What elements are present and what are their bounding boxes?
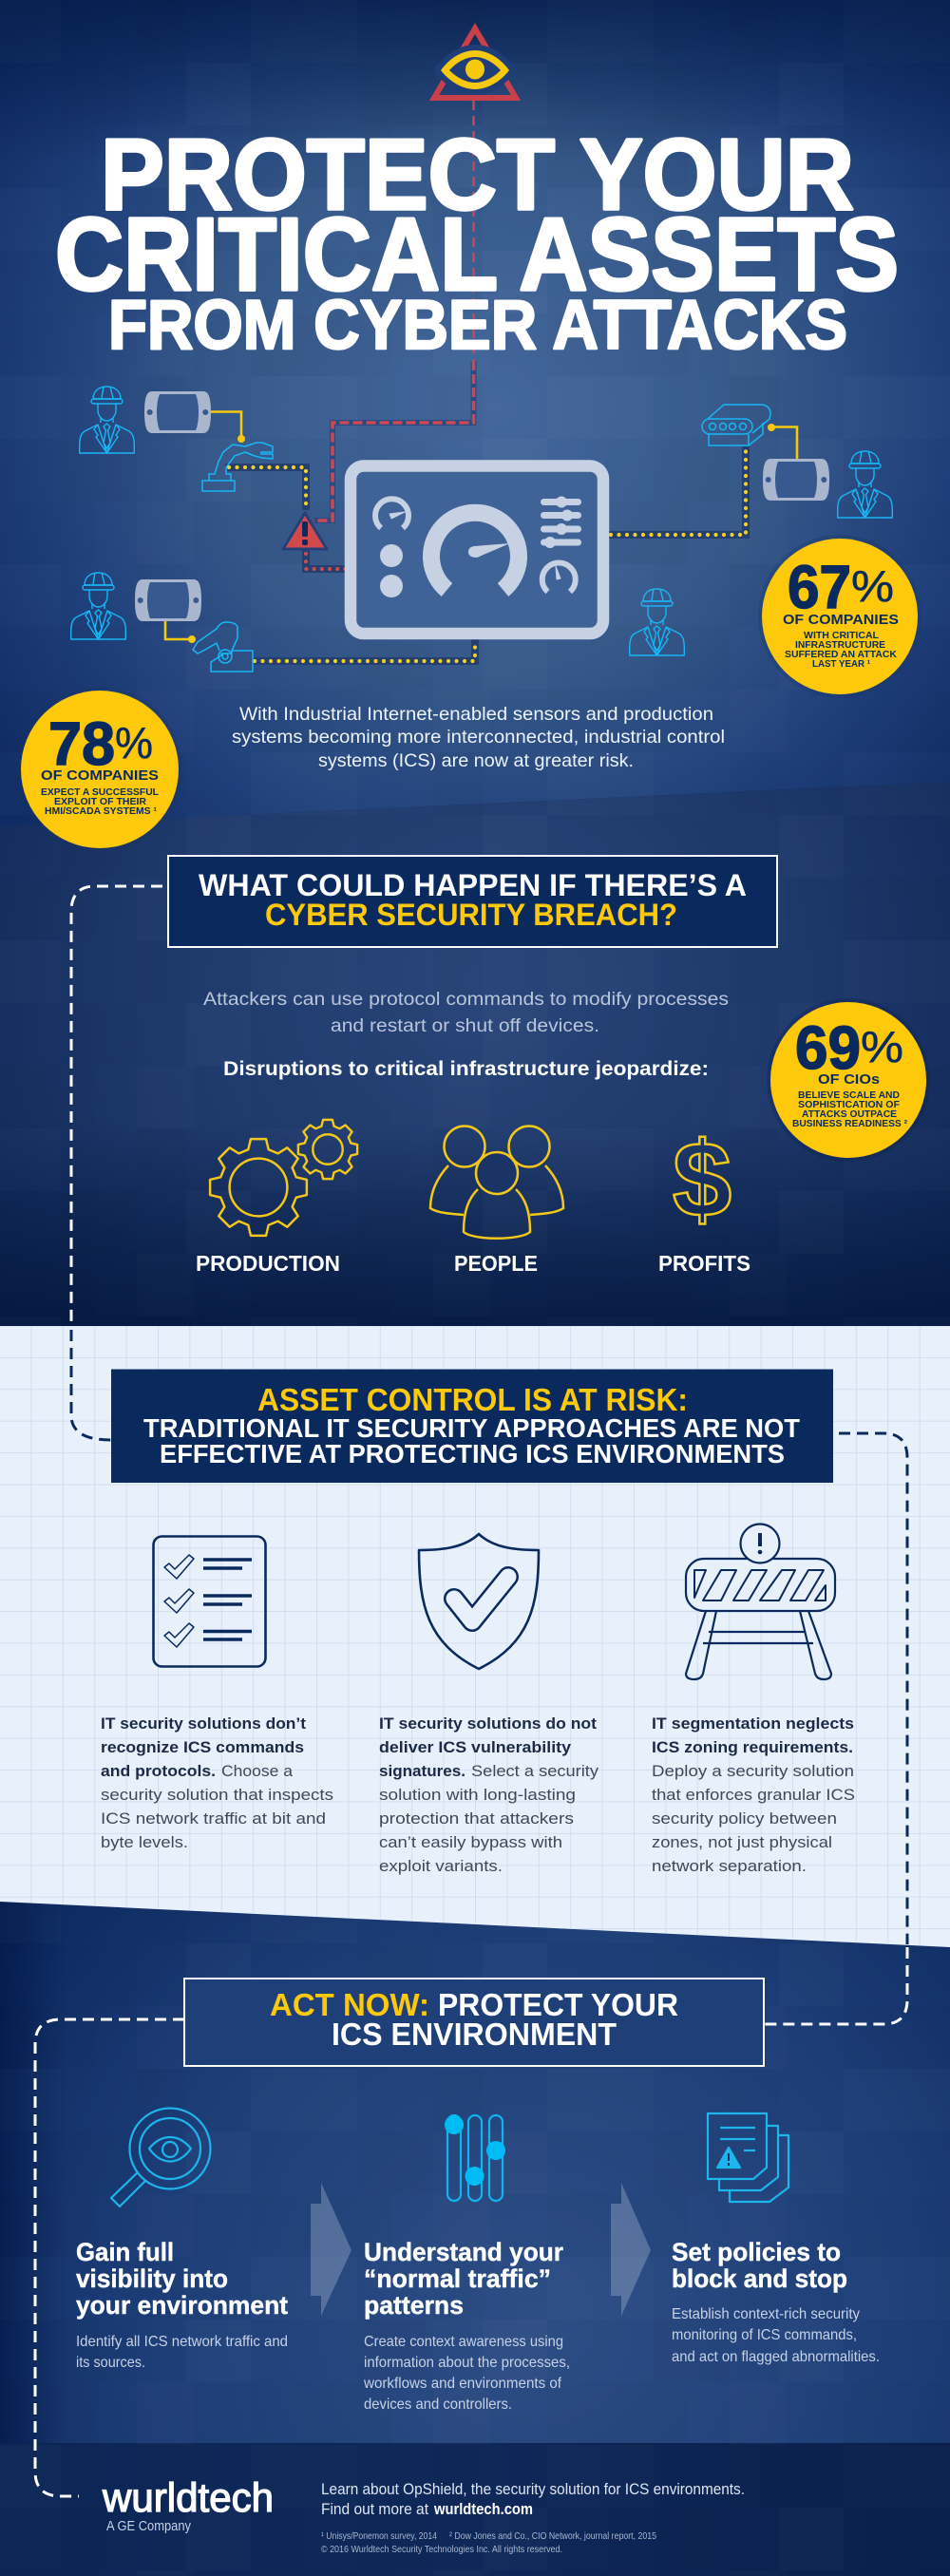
red dashed connector: [314, 101, 473, 521]
heading box: act now: ICS ENVIRONMENT: [332, 2017, 617, 2052]
footnotes: ² Dow Jones and Co., CIO Network, journal report, 2015: [449, 2530, 656, 2542]
step: understand normal traffic: Understand your: [364, 2238, 563, 2266]
text column: IT segmentation neglects: ICS zoning requirements.: [652, 1738, 853, 1756]
stat: 69 percent: 69: [795, 1013, 861, 1082]
label: profits: PROFITS: [658, 1251, 750, 1276]
step: understand normal traffic: Create context awareness using: [364, 2334, 563, 2350]
stat: 67 percent: OF COMPANIES: [783, 613, 899, 628]
icon: screen top left: [144, 391, 211, 433]
title: PROTECT YOUR: [101, 119, 854, 231]
icon: eye in triangle: [434, 28, 516, 98]
step: understand normal traffic: information about the processes,: [364, 2355, 570, 2371]
stat: 67 percent: SUFFERED AN ATTACK: [785, 649, 897, 660]
text column: IT segmentation neglects: IT segmentation neglects: [652, 1714, 854, 1733]
icon: robot arm top: [202, 443, 273, 491]
stat: 78 percent: HMI/SCADA SYSTEMS ¹: [45, 805, 157, 817]
footer call to action: [321, 2480, 745, 2518]
stat: 67 percent: [758, 535, 922, 698]
icon: worker top left: [80, 387, 134, 453]
dotted connector: alert to panel: [306, 550, 346, 569]
step: set policies: Establish context-rich security: [672, 2306, 860, 2322]
yellow link lower left: [165, 621, 196, 643]
step: set policies: monitoring of ICS commands,: [672, 2327, 857, 2343]
stat: 78 percent: EXPLOIT OF THEIR: [54, 796, 146, 807]
footer call to action: Learn about OpShield, the security solution for ICS environments.: [321, 2480, 745, 2498]
footnotes: [321, 2530, 656, 2555]
text column: IT segmentation neglects: Deploy a security solution: [652, 1762, 854, 1780]
text column: IT security solutions don't recognize: ICS network traffic at bit and: [101, 1809, 326, 1828]
step: set policies: block and stop: [672, 2264, 847, 2293]
heading box: act now: [184, 1979, 764, 2066]
background: act now section: [0, 1900, 950, 2446]
stat: 69 percent: OF CIOs: [818, 1072, 880, 1088]
icon: robot arm lower: [193, 622, 253, 672]
yellow link top left: [211, 412, 245, 443]
footer call to action: wurldtech.com: [433, 2500, 533, 2518]
icon: alert triangle: [283, 513, 327, 549]
text column: IT security solutions don't recognize: byte levels.: [101, 1833, 188, 1851]
dotted connector: panel to lower robot arm: [253, 638, 475, 661]
stat: 69 percent: BUSINESS READINESS ²: [792, 1118, 907, 1129]
text column: IT security solutions do not deliver: deliver ICS vulnerability: [379, 1738, 572, 1756]
step: gain full visibility: Gain full: [76, 2238, 174, 2266]
stat: 67 percent: %: [851, 561, 894, 611]
stat: 69 percent: SOPHISTICATION OF: [798, 1099, 901, 1110]
step: set policies: Set policies to: [672, 2238, 841, 2266]
connector: dashed path left, breach box to asset box: [71, 886, 162, 1440]
heading box: asset control: EFFECTIVE AT PROTECTING ICS ENVIRONMENTS: [160, 1439, 785, 1468]
stat: 67 percent: LAST YEAR ¹: [812, 658, 870, 670]
stat: 78 percent: [17, 687, 182, 852]
heading box: breach: [168, 856, 777, 947]
text column: IT security solutions do not deliver: [379, 1714, 599, 1875]
step: understand normal traffic: workflows and environments of: [363, 2376, 562, 2392]
icon: gears: [210, 1120, 357, 1236]
text column: IT security solutions do not deliver: protection that attackers: [379, 1809, 574, 1828]
icon: people: [430, 1127, 563, 1239]
text column: IT security solutions don't recognize: IT security solutions don’t: [101, 1714, 306, 1733]
icon: dollar sign: $: [673, 1120, 732, 1239]
icon: conveyor machine: [702, 405, 770, 445]
background: footer band: [0, 2443, 950, 2576]
text: attackers: and restart or shut off devices.: [331, 1016, 599, 1036]
step: understand normal traffic: [363, 2238, 570, 2413]
text column: IT segmentation neglects: [652, 1714, 855, 1875]
step: understand normal traffic: patterns: [364, 2291, 464, 2320]
title: [55, 119, 899, 364]
heading box: breach: CYBER SECURITY BREACH?: [265, 898, 677, 932]
logo: wurldtech: wurldtech: [102, 2475, 274, 2521]
text column: IT segmentation neglects: security policy between: [652, 1809, 837, 1828]
intro paragraph: [232, 704, 725, 771]
heading box: act now: ACT NOW:: [270, 1987, 429, 2022]
stat: 78 percent: EXPECT A SUCCESSFUL: [41, 786, 160, 798]
background: light grid section: [0, 1326, 950, 1947]
arrow: step two to three: [611, 2183, 651, 2316]
step: gain full visibility: Identify all ICS network traffic and: [76, 2334, 288, 2350]
connector: dashed path left, act now box to logo: [35, 2019, 184, 2496]
icon: worker lower left: [71, 573, 125, 639]
icon: worker right: [838, 451, 892, 518]
stat: 67 percent: 67: [788, 553, 851, 621]
background: breach section: [0, 782, 950, 1326]
heading box: asset control: TRADITIONAL IT SECURITY APPROACHES ARE NOT: [143, 1413, 800, 1443]
icon: control panel: [351, 465, 603, 634]
step: gain full visibility: visibility into: [76, 2264, 228, 2293]
logo: wurldtech: A GE Company: [106, 2518, 191, 2534]
icon: screen lower left: [135, 579, 201, 621]
label: production: PRODUCTION: [196, 1251, 340, 1276]
step: gain full visibility: [76, 2238, 288, 2371]
footer call to action: Find out more at: [321, 2500, 428, 2518]
icon: screen right: [763, 459, 829, 501]
text: attackers: [203, 990, 729, 1036]
icon: magnifier with eye: [111, 2109, 211, 2207]
connector: dashed path right, asset box to act now box: [765, 1433, 907, 2024]
text column: IT security solutions don't recognize: recognize ICS commands: [101, 1738, 304, 1756]
text column: IT security solutions do not deliver: exploit variants.: [379, 1857, 503, 1875]
stat: 69 percent: BELIEVE SCALE AND: [798, 1089, 900, 1101]
intro paragraph: With Industrial Internet-enabled sensors and production: [239, 704, 713, 725]
stat: 78 percent: 78: [48, 710, 115, 778]
text column: IT security solutions don't recognize: [101, 1714, 333, 1851]
step: gain full visibility: your environment: [76, 2291, 288, 2320]
arrow: step one to two: [311, 2183, 352, 2316]
intro paragraph: systems (ICS) are now at greater risk.: [318, 750, 634, 771]
intro paragraph: systems becoming more interconnected, industrial control: [232, 727, 725, 748]
step: gain full visibility: its sources.: [76, 2355, 145, 2371]
title: CRITICAL ASSETS: [55, 197, 899, 313]
text column: IT security solutions don't recognize: and protocols.: [101, 1762, 216, 1780]
step: understand normal traffic: devices and controllers.: [364, 2396, 512, 2413]
diagram: connected ICS devices: [71, 387, 892, 672]
step: understand normal traffic: “normal traffic”: [364, 2264, 551, 2293]
stat: 67 percent: WITH CRITICAL: [804, 630, 880, 641]
stat: 67 percent: INFRASTRUCTURE: [795, 639, 885, 651]
text column: IT security solutions do not deliver: IT security solutions do not: [379, 1714, 597, 1733]
text column: IT security solutions do not deliver: signatures.: [379, 1762, 466, 1780]
dotted connector: robot arm to alert: [225, 467, 306, 510]
text column: IT segmentation neglects: zones, not just physical: [652, 1833, 832, 1851]
stat: 69 percent: ATTACKS OUTPACE: [802, 1108, 897, 1120]
text column: IT segmentation neglects: that enforces granular ICS: [652, 1786, 855, 1804]
stat: 78 percent: %: [115, 718, 153, 767]
footnotes: © 2016 Wurldtech Security Technologies Inc. All rights reserved.: [321, 2544, 562, 2555]
stat: 69 percent: [767, 998, 930, 1162]
dotted connector: panel to conveyor: [609, 446, 746, 535]
stat: 78 percent: OF COMPANIES: [41, 768, 159, 784]
text: attackers: Attackers can use protocol commands to modify processes: [203, 990, 729, 1010]
icon: barricade: [686, 1524, 835, 1679]
step: set policies: [672, 2238, 880, 2365]
stat: 69 percent: %: [861, 1022, 903, 1071]
text column: IT security solutions don't recognize: security solution that inspects: [101, 1786, 333, 1804]
heading box: breach: WHAT COULD HAPPEN IF THERE’S A: [199, 868, 747, 902]
icon: checklist: [154, 1537, 266, 1666]
footnotes: ¹ Unisys/Ponemon survey, 2014: [321, 2530, 437, 2542]
heading box: asset control: ASSET CONTROL IS AT RISK:: [257, 1382, 688, 1417]
icon: sliders: [445, 2115, 505, 2201]
text column: IT security solutions do not deliver: Select a security: [471, 1762, 599, 1780]
icon: worker below panel: [630, 589, 684, 655]
yellow link right: [768, 424, 797, 459]
background: top section: [0, 0, 950, 826]
icon: shield with check: [419, 1534, 539, 1669]
text: disruptions: Disruptions to critical infrastructure jeopardize:: [223, 1058, 709, 1080]
text column: IT security solutions do not deliver: can’t easily bypass with: [379, 1833, 562, 1851]
step: set policies: and act on flagged abnormalities.: [672, 2349, 880, 2365]
label: people: PEOPLE: [454, 1251, 538, 1276]
icon: policy documents with warning: [708, 2113, 788, 2202]
text column: IT security solutions don't recognize: Choose a: [221, 1762, 294, 1780]
heading box: act now: PROTECT YOUR: [438, 1987, 678, 2022]
heading box: asset control: [111, 1370, 833, 1483]
text column: IT segmentation neglects: network separation.: [652, 1857, 807, 1875]
text column: IT security solutions do not deliver: solution with long-lasting: [379, 1786, 576, 1804]
title: FROM CYBER ATTACKS: [108, 287, 847, 364]
